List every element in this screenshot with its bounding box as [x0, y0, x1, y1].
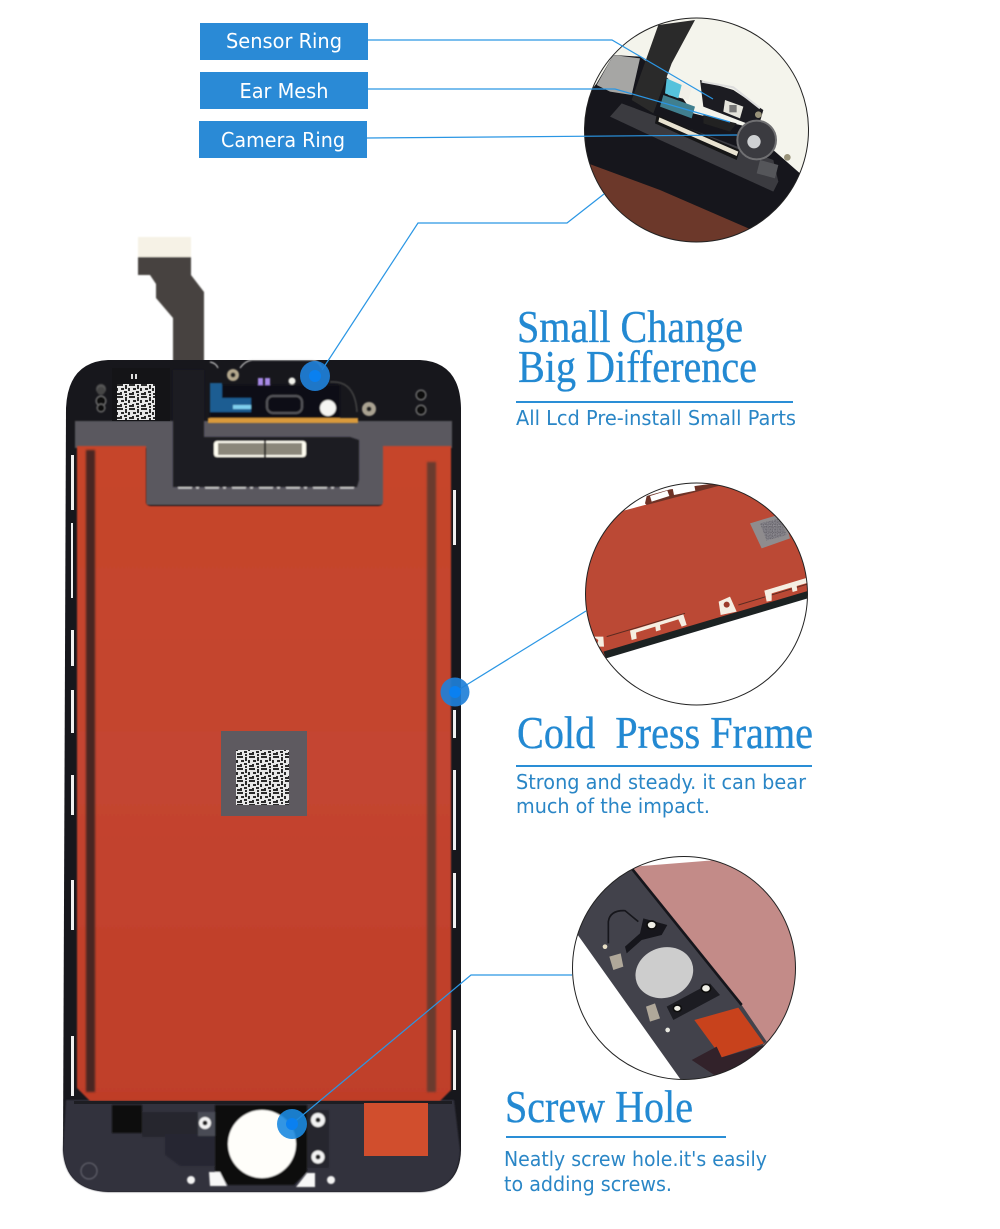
marker: middle dot [440, 678, 470, 706]
description: Neatly screw hole.it's easily [504, 1147, 767, 1171]
label: Camera Ring [199, 121, 367, 158]
top grey adhesive band [75, 421, 452, 505]
bottom circle outline [572, 856, 796, 1080]
earpiece components [96, 360, 426, 423]
dark side strips on the red sheet [86, 450, 436, 1092]
middle circle outline [586, 483, 808, 705]
bottom detail circle: screw hole [567, 853, 800, 1087]
side white clips [71, 455, 456, 1096]
section: Screw Hole [504, 1082, 767, 1196]
top left QR label [112, 368, 170, 421]
label: Ear Mesh [200, 72, 368, 109]
marker: bottom dot [277, 1109, 307, 1139]
middle detail circle: cold press frame [580, 477, 813, 713]
flex cable over screen [173, 370, 359, 488]
description: much of the impact. [516, 794, 710, 818]
top detail circle: earpiece parts [583, 17, 813, 253]
heading: Cold Press Frame [517, 708, 813, 758]
label: Sensor Ring [200, 23, 368, 60]
label: Sensor Ring: Sensor Ring [226, 29, 342, 53]
red back sheet [77, 446, 451, 1101]
lower frame edge of red sheet [74, 1101, 452, 1104]
section: Small Change Big Difference [516, 302, 796, 430]
bottom frame slate area [63, 1100, 460, 1192]
description [516, 770, 807, 818]
section: Cold Press Frame [516, 708, 813, 818]
phone LCD screen assembly [63, 237, 461, 1192]
description: Strong and steady. it can bear [516, 770, 807, 794]
heading: Big Difference [518, 342, 757, 392]
flex cable top connector [138, 237, 204, 372]
phone black frame [63, 360, 461, 1192]
centre QR label [221, 731, 307, 816]
label: Ear Mesh: Ear Mesh [240, 79, 328, 103]
callout lines [292, 40, 737, 1124]
description: All Lcd Pre-install Small Parts [516, 406, 796, 430]
description: to adding screws. [504, 1172, 672, 1196]
home button area [81, 1105, 335, 1187]
heading [517, 302, 757, 392]
marker: top dot [300, 361, 330, 391]
heading: Small Change [517, 302, 743, 352]
label: Camera Ring: Camera Ring [221, 128, 345, 152]
top circle outline [584, 18, 808, 242]
heading: Screw Hole [505, 1082, 693, 1132]
orange adhesive tab [364, 1103, 428, 1156]
description [504, 1147, 767, 1196]
